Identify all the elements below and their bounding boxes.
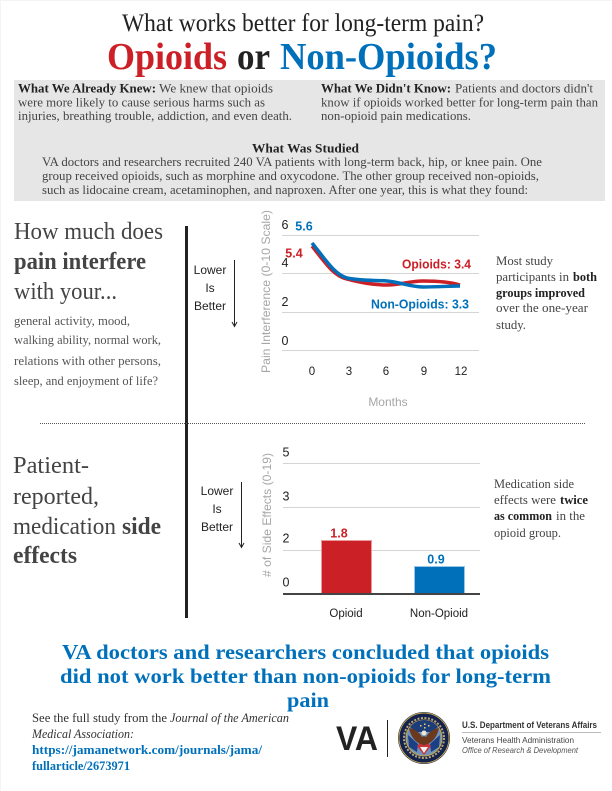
text: interference activities: general activity, mood,	[14, 314, 130, 328]
heading: side effects: Patient-	[13, 453, 89, 479]
bar labels: Opioid	[329, 608, 363, 620]
title: or	[237, 36, 270, 78]
text: what we didn't know: know if opioids worked better for long-term pain than	[321, 96, 599, 110]
y axis labels: 0	[283, 576, 290, 590]
bar chart: side effects	[260, 446, 480, 620]
callout: lower is better (side effects): Is	[212, 502, 222, 516]
footer citation: Medical Association:	[31, 727, 134, 741]
data labels: Non-Opioids: 3.3	[371, 298, 469, 312]
footer citation: See the full study from the	[32, 711, 167, 725]
heading: pain interference	[14, 219, 163, 305]
text: interference activities	[14, 314, 161, 388]
text: what we didn't know: non-opioid pain medications.	[321, 109, 471, 123]
callout: lower is better (side effects): Better	[201, 520, 233, 534]
x axis labels	[309, 366, 467, 378]
y axis labels: 6	[282, 218, 289, 232]
icon: VA seal	[398, 712, 450, 764]
x axis labels: 3	[346, 366, 352, 378]
logo: VA wordmark: VA	[336, 720, 378, 758]
text: interference activities: walking ability, normal work,	[14, 333, 161, 347]
y axis labels: 0	[282, 334, 289, 348]
text: side effects finding	[494, 477, 588, 540]
text: what we already knew: injuries, breathing trouble, addiction, and even death.	[18, 109, 292, 123]
axis title: months: Months	[368, 395, 408, 409]
logo: department text	[462, 720, 601, 755]
heading: side effects: side	[122, 514, 161, 540]
vertical divider	[185, 226, 188, 618]
axis title: number of side effects: # of Side Effects (0-19)	[260, 453, 274, 577]
title	[107, 10, 497, 78]
conclusion: pain	[287, 688, 329, 712]
text: pain finding	[496, 254, 597, 332]
y axis labels	[282, 218, 289, 348]
footer citation: https://jamanetwork.com/journals/jama/	[32, 743, 263, 757]
conclusion	[60, 640, 551, 712]
callout: lower is better (pain): Lower	[194, 263, 226, 277]
text: side effects finding: as common	[494, 509, 552, 523]
text: what we didn't know: What We Didn't Know:	[321, 82, 451, 96]
heading: side effects	[13, 453, 161, 569]
text: what was studied: group received opioids, such as morphine and oxycodone. The other group received non-opioids,	[42, 169, 539, 183]
series: opioids	[312, 246, 460, 285]
title: Opioids	[107, 36, 227, 78]
logo: department text: Office of Research & Development	[462, 746, 579, 755]
line chart: pain interference	[259, 210, 479, 409]
bar values: 0.9	[427, 552, 445, 566]
callout: lower is better (pain): Better	[194, 299, 226, 313]
data labels	[285, 220, 471, 312]
footer citation	[31, 711, 289, 773]
data labels: 5.4	[285, 246, 303, 260]
text: interference activities: relations with other persons,	[14, 354, 161, 368]
text: side effects finding: opioid group.	[494, 526, 561, 540]
text: what was studied: What Was Studied	[252, 142, 359, 156]
y axis labels: 3	[283, 490, 290, 504]
data labels: 5.6	[295, 220, 313, 234]
heading: side effects: medication	[13, 514, 116, 540]
heading: pain interference: How much does	[14, 219, 163, 245]
text: pain finding: participants in	[496, 270, 570, 284]
x axis labels: 6	[383, 366, 389, 378]
callout: lower is better (side effects): Lower	[201, 484, 233, 498]
heading: pain interference: with your...	[14, 279, 117, 305]
heading: side effects: effects	[13, 543, 77, 569]
series: non-opioids	[312, 243, 460, 287]
x axis labels: 9	[421, 366, 427, 378]
bar labels: Non-Opioid	[410, 608, 468, 620]
text: interference activities: sleep, and enjoyment of life?	[14, 374, 158, 388]
title: Non-Opioids?	[280, 36, 497, 78]
bar: non-opioid	[414, 566, 464, 594]
text: what we already knew: We knew that opioids	[159, 82, 273, 96]
text: pain finding: both	[573, 270, 597, 284]
footer citation: Journal of the American	[170, 711, 289, 725]
y axis labels: 4	[282, 256, 289, 270]
axis title: pain interference scale: Pain Interference (0-10 Scale)	[259, 210, 273, 373]
x axis labels: 0	[309, 366, 315, 378]
y axis labels: 2	[283, 532, 290, 546]
text: pain finding: over the one-year	[496, 301, 589, 315]
text: what we didn't know	[321, 82, 599, 123]
text: side effects finding: twice	[560, 493, 588, 507]
text: what we already knew: were more likely to cause serious harms such as	[18, 96, 265, 110]
bar values	[330, 526, 445, 566]
logo: department text: Veterans Health Administration	[462, 735, 574, 745]
text: what was studied	[42, 142, 542, 197]
data labels: Opioids: 3.4	[402, 258, 471, 272]
text: what we already knew: What We Already Knew:	[18, 82, 156, 96]
text: pain finding: groups improved	[496, 286, 585, 300]
callout: lower is better (side effects)	[201, 482, 244, 548]
panel: background summary	[14, 80, 605, 201]
text: what we didn't know: Patients and doctors didn't	[455, 82, 594, 96]
bar values: 1.8	[330, 526, 348, 540]
text: side effects finding: effects were	[494, 493, 556, 507]
text: side effects finding: Medication side	[494, 477, 574, 491]
text: what was studied: VA doctors and researchers recruited 240 VA patients with long-term back, hip, or knee pain. One	[42, 155, 542, 169]
text: what was studied: such as lidocaine cream, acetaminophen, and naproxen. After one year, this is what they found:	[42, 183, 528, 197]
heading: side effects: reported,	[13, 484, 99, 510]
footer citation: fullarticle/2673971	[32, 759, 130, 773]
y axis labels: 5	[283, 446, 290, 460]
text: pain finding: Most study	[496, 254, 554, 268]
y axis labels: 2	[282, 295, 289, 309]
conclusion: VA doctors and researchers concluded that opioids	[62, 640, 549, 664]
callout: lower is better (pain)	[194, 260, 237, 326]
title: What works better for long-term pain?	[122, 10, 484, 37]
callout: lower is better (pain): Is	[205, 281, 215, 295]
text: what we already knew	[18, 82, 292, 123]
bar labels	[329, 608, 468, 620]
conclusion: did not work better than non-opioids for long-term	[60, 664, 551, 688]
text: side effects finding: in the	[556, 509, 585, 523]
x axis labels: 12	[455, 366, 467, 378]
bar: opioid	[322, 540, 372, 594]
text: pain finding: study.	[496, 318, 526, 332]
heading: pain interference: pain interfere	[14, 249, 146, 275]
y axis labels	[283, 446, 290, 590]
